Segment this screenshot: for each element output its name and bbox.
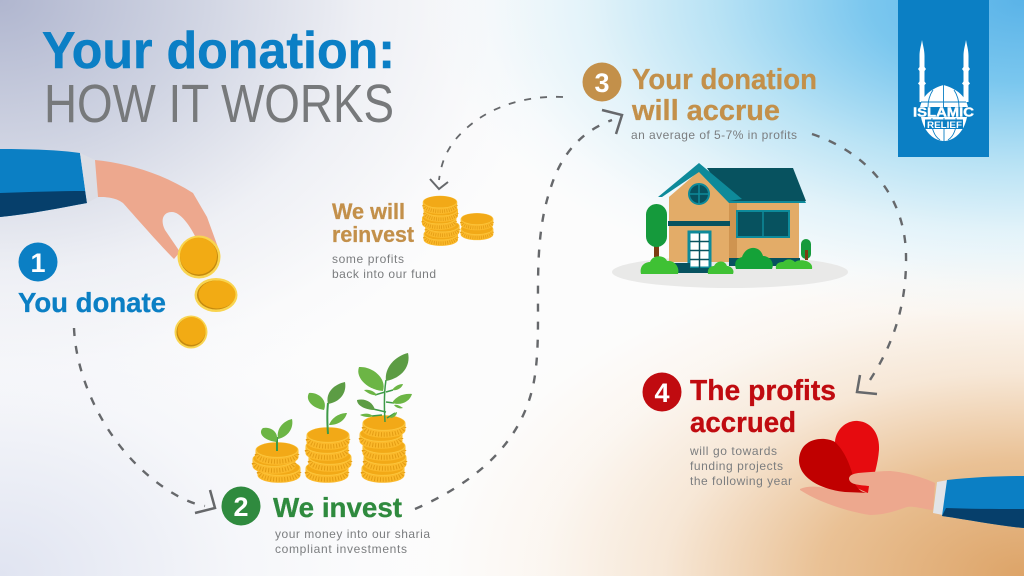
arrow: step 3 to reinvest bbox=[430, 97, 563, 189]
arrow: step 1 to step 2 bbox=[74, 328, 215, 513]
house windows and door bbox=[689, 184, 709, 204]
reinvest text: back into our fund bbox=[332, 267, 436, 281]
step 1 badge bbox=[18, 242, 58, 282]
step 2 badge bbox=[222, 486, 260, 526]
house ground shadow bbox=[612, 256, 848, 288]
coin: falling top bbox=[178, 236, 220, 278]
heart bbox=[799, 421, 879, 493]
step 2 badge: 2 bbox=[233, 492, 249, 522]
step 4 heading: The profits bbox=[690, 375, 836, 407]
step 4 text: will go towards bbox=[689, 444, 777, 458]
reinvest text: some profits bbox=[332, 252, 404, 266]
step 2 heading: We invest bbox=[273, 492, 402, 523]
step 3 heading: Your donation bbox=[632, 64, 817, 96]
coin stack: large bbox=[360, 415, 406, 483]
step 3 badge bbox=[582, 62, 622, 102]
plant: small bbox=[261, 419, 292, 451]
step 3 text: an average of 5-7% in profits bbox=[631, 128, 797, 142]
step 2 text: compliant investments bbox=[275, 542, 407, 556]
step 1 badge: 1 bbox=[30, 248, 46, 278]
coin stacks with plants bbox=[252, 353, 412, 483]
hand: thumb bbox=[849, 471, 915, 495]
plant: large bbox=[357, 353, 412, 422]
title: Your donation: Your donation: bbox=[42, 22, 395, 80]
coin: falling middle bbox=[194, 278, 238, 312]
trees and bushes bbox=[654, 227, 659, 257]
logo: Islamic Relief: ISLAMIC bbox=[913, 104, 975, 120]
logo: Islamic Relief: RELIEF bbox=[927, 120, 962, 131]
coin stack: reinvest tall bbox=[422, 196, 460, 246]
plant: medium bbox=[308, 382, 347, 434]
step 4 text: the following year bbox=[690, 474, 792, 488]
step 2 text: your money into our sharia bbox=[275, 527, 430, 541]
step 3 badge: 3 bbox=[594, 68, 610, 98]
logo: Islamic Relief bbox=[898, 0, 989, 157]
house roof bbox=[707, 168, 806, 201]
arrow: step 3 to step 4 bbox=[812, 134, 906, 394]
house bbox=[612, 163, 848, 288]
hand: receiving bbox=[800, 471, 1024, 528]
house body bbox=[669, 171, 729, 262]
title: How it works: HOW IT WORKS bbox=[44, 74, 394, 134]
coin: falling bottom bbox=[174, 316, 208, 348]
arrow: step 2 to step 3 bbox=[415, 110, 622, 509]
step 3 heading: will accrue bbox=[631, 95, 780, 127]
reinvest heading: We will bbox=[332, 199, 405, 224]
step 1 heading: You donate bbox=[18, 287, 166, 318]
step 4 badge: 4 bbox=[654, 378, 670, 408]
hand: donating bbox=[0, 149, 219, 259]
step 4 text: funding projects bbox=[690, 459, 783, 473]
coin stack: medium bbox=[306, 427, 352, 483]
reinvest heading: reinvest bbox=[332, 222, 415, 247]
coin stack: reinvest short bbox=[461, 213, 493, 240]
step 4 badge bbox=[642, 372, 682, 412]
coin stack: small bbox=[252, 442, 300, 483]
step 4 heading: accrued bbox=[690, 407, 796, 439]
